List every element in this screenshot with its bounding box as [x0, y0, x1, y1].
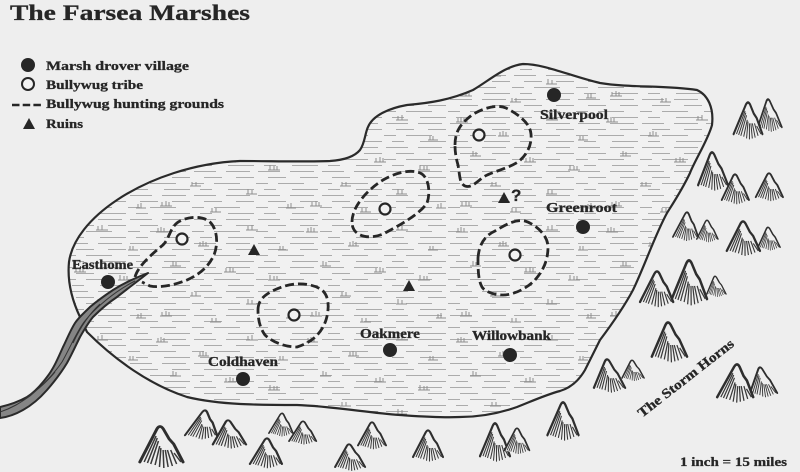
label: the storm horns: The Storm Horns [635, 336, 737, 420]
bullywug tribes [176, 130, 520, 320]
legend [12, 58, 224, 131]
legend: ruins: Ruins [46, 116, 83, 131]
legend: bullywug hunting grounds: Bullywug hunting grounds [46, 96, 224, 111]
ruins [248, 192, 510, 291]
village: Coldhaven [208, 354, 279, 386]
legend: bullywug tribe [22, 77, 143, 92]
hunting grounds: north [455, 106, 531, 187]
hunting grounds: south [258, 284, 328, 347]
scale: 1 inch = 15 miles [680, 454, 787, 469]
village: Willowbank [472, 328, 552, 362]
village: Easthome: Easthome [72, 257, 133, 272]
marsh area [69, 64, 712, 417]
mountains: the storm horns [138, 99, 783, 471]
hunting grounds: east [135, 217, 217, 287]
village: Oakmere: Oakmere [360, 326, 420, 341]
village: Greenroot [546, 200, 618, 234]
village: Silverpool: Silverpool [540, 107, 608, 122]
legend: bullywug tribe: Bullywug tribe [46, 77, 143, 92]
river [0, 273, 148, 418]
village: Easthome [72, 257, 133, 289]
hunting grounds: centre [352, 171, 429, 237]
hunting grounds: southeast [478, 221, 548, 295]
title: The Farsea Marshes [10, 0, 251, 25]
question mark: ? [511, 186, 521, 205]
legend: ruins [23, 116, 83, 131]
legend: marsh drover village [21, 58, 189, 73]
village: Willowbank: Willowbank [472, 328, 552, 343]
village: Greenroot: Greenroot [546, 200, 618, 215]
legend: marsh drover village: Marsh drover village [46, 58, 189, 73]
village: Coldhaven: Coldhaven [208, 354, 279, 369]
village: Silverpool [540, 88, 608, 122]
village: Oakmere [360, 326, 420, 357]
